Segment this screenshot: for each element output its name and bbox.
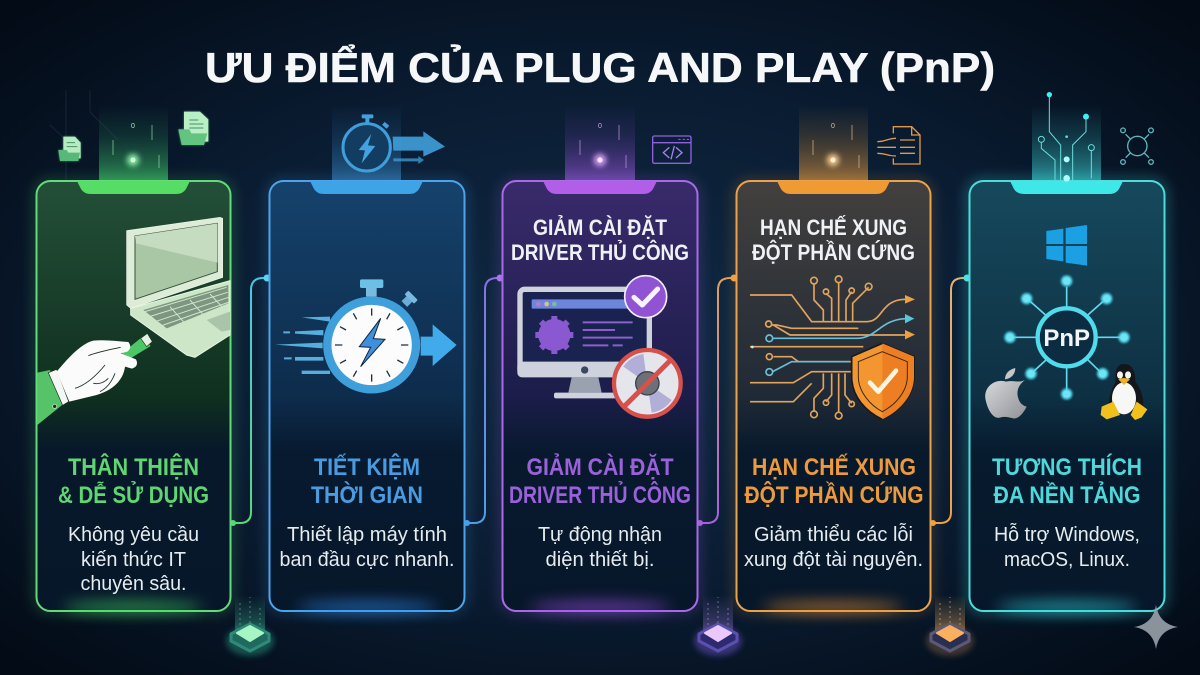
icon: Windows logo xyxy=(1046,225,1087,266)
icon: small stopwatch with arrows xyxy=(343,114,445,171)
icon: purple chip xyxy=(694,595,742,656)
heading: reduce manual install: DRIVER THỦ CÔNG xyxy=(509,480,691,509)
heading: friendly xyxy=(58,453,209,509)
top heading: limit conflict: ĐỘT PHẦN CỨNG xyxy=(752,240,915,265)
panel: reduce manual driver install xyxy=(502,105,698,613)
description: reduce manual install xyxy=(538,524,662,571)
panel: friendly and easy to use: 0 xyxy=(131,123,135,130)
heading: save time: THỜI GIAN xyxy=(311,481,423,509)
description: friendly xyxy=(68,524,199,595)
heading: reduce manual install xyxy=(509,452,691,509)
icon: PnP hub xyxy=(1004,275,1130,400)
icon: large folder xyxy=(178,112,208,145)
top heading: reduce manual install: DRIVER THỦ CÔNG xyxy=(511,240,689,265)
icon: code window xyxy=(653,136,691,163)
description: friendly: Không yêu cầu xyxy=(68,524,199,546)
top heading: reduce manual install xyxy=(511,215,689,265)
description: save time: ban đầu cực nhanh. xyxy=(280,549,454,571)
panel: cross-platform compatibility xyxy=(969,92,1165,613)
top heading: limit conflict: HẠN CHẾ XUNG xyxy=(760,215,907,240)
icon: stopwatch xyxy=(275,279,457,389)
heading: save time: TIẾT KIỆM xyxy=(314,453,420,481)
description: compatibility: Hỗ trợ Windows, xyxy=(994,523,1140,546)
heading: friendly: THÂN THIỆN xyxy=(68,453,199,481)
icon: document with merging arrows xyxy=(877,127,920,164)
description: reduce manual install: diện thiết bị. xyxy=(546,549,654,571)
heading: compatibility: ĐA NỀN TẢNG xyxy=(994,480,1140,509)
description: limit conflict: xung đột tài nguyên. xyxy=(744,549,923,571)
heading: limit conflict xyxy=(744,453,924,509)
description: save time xyxy=(280,524,454,571)
description: limit conflict: Giảm thiểu các lỗi xyxy=(754,523,913,546)
icon: green chip xyxy=(226,595,274,656)
description: save time: Thiết lập máy tính xyxy=(287,524,447,546)
icon: sparkle watermark xyxy=(1134,605,1178,649)
icon: Linux penguin xyxy=(1101,364,1147,420)
icon: PnP hub: PnP xyxy=(1043,325,1090,352)
heading: reduce manual install: GIẢM CÀI ĐẶT xyxy=(526,452,674,481)
heading: limit conflict: HẠN CHẾ XUNG xyxy=(752,453,916,481)
description: reduce manual install: Tự động nhận xyxy=(538,524,662,546)
heading: compatibility: TƯƠNG THÍCH xyxy=(992,453,1142,481)
icon: orange chip xyxy=(926,595,974,656)
icon: laptop and USB in hand xyxy=(37,217,230,425)
icon: network node xyxy=(1121,128,1153,164)
panel: limit hardware conflict xyxy=(736,105,931,613)
title: ƯU ĐIỂM CỦA PLUG AND PLAY (PnP) xyxy=(205,43,995,91)
icon: circuit with shield xyxy=(750,276,915,419)
panel: limit hardware conflict: 0 xyxy=(831,123,835,130)
icon: small folder xyxy=(58,137,81,161)
description: compatibility: macOS, Linux. xyxy=(1004,549,1130,571)
top heading: limit conflict xyxy=(752,215,915,265)
panel: reduce manual driver install: 0 xyxy=(598,123,602,130)
description: friendly: chuyên sâu. xyxy=(80,573,186,595)
description: limit conflict xyxy=(744,523,923,571)
heading: friendly: & DỄ SỬ DỤNG xyxy=(58,480,209,509)
heading: limit conflict: ĐỘT PHẦN CỨNG xyxy=(744,481,924,509)
panel: friendly and easy to use xyxy=(36,105,231,613)
description: friendly: kiến thức IT xyxy=(81,549,186,571)
description: compatibility xyxy=(994,523,1140,571)
heading: save time xyxy=(311,453,423,509)
icon: monitor with check and crossed disc xyxy=(517,276,681,417)
icon: Apple logo xyxy=(985,368,1027,418)
heading: compatibility xyxy=(992,453,1142,509)
top heading: reduce manual install: GIẢM CÀI ĐẶT xyxy=(533,215,667,240)
connector lines between cards xyxy=(230,274,970,526)
panel: save time xyxy=(269,105,465,613)
icon: circuit above card xyxy=(1038,92,1094,182)
